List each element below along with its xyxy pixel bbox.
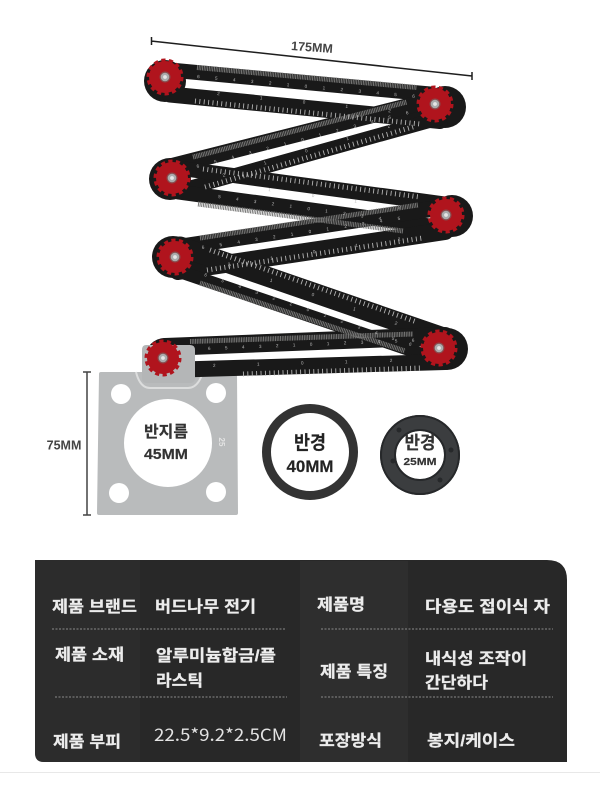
ruler digits: 654321012345	[201, 216, 401, 250]
panel background	[35, 560, 567, 762]
ring: 25MM	[381, 416, 459, 494]
ruler digits: 21012	[217, 91, 392, 113]
dimension: 75MM height	[47, 372, 91, 515]
row: features: 간단하다	[425, 674, 488, 692]
row: features: 제품 특징	[320, 663, 388, 681]
ring: 25MM: 반경	[404, 433, 436, 453]
ruler digits: 6543210123456	[196, 110, 409, 169]
ruler digits: 21012	[213, 358, 393, 368]
ring: 40MM: 반경	[294, 432, 326, 454]
column shading	[35, 560, 408, 762]
slider tab	[142, 345, 195, 383]
ruler digits	[196, 74, 415, 368]
row: brand	[52, 598, 256, 616]
row: material: 라스틱	[156, 672, 203, 690]
mounting plate: 45MM	[144, 446, 188, 463]
row: packaging	[319, 732, 515, 750]
row: features	[320, 650, 527, 692]
dimension: 175MM width	[151, 37, 472, 80]
row dividers	[52, 629, 553, 697]
ruler digits: 21012	[227, 236, 401, 267]
row: material: 알루미늄합금/플	[156, 647, 276, 665]
gray fine scales	[190, 68, 418, 351]
mounting plate	[97, 372, 238, 515]
row: material	[55, 646, 276, 690]
row: product name	[317, 596, 550, 616]
dimension: 175MM width: 175MM	[291, 39, 333, 56]
row: packaging: 봉지/케이스	[427, 732, 515, 750]
row: volume: 제품 부피	[53, 733, 121, 751]
ruler digits: 21012	[222, 123, 391, 178]
tick scales	[195, 101, 423, 374]
row: packaging: 포장방식	[319, 732, 382, 750]
joint ends	[144, 60, 473, 378]
ring: 40MM	[266, 408, 354, 496]
row: features: 내식성 조작이	[425, 650, 527, 668]
row: volume	[53, 721, 287, 751]
row: brand: 제품 브랜드	[52, 598, 137, 616]
row: product name: 다용도 접이식 자	[425, 598, 550, 616]
mounting plate: 25	[217, 438, 226, 447]
ruler digits: 21012	[228, 263, 399, 326]
dimension: 75MM height: 75MM	[47, 438, 81, 452]
folding ruler	[142, 60, 473, 383]
row: product name: 제품명	[317, 596, 365, 614]
row: volume: 22.5*9.2*2.5CM	[154, 721, 287, 746]
ruler digits: 6543210123456	[208, 338, 415, 351]
mounting plate: 반지름	[144, 423, 188, 441]
ring: 25MM: 25MM	[404, 457, 436, 468]
row: material: 제품 소재	[55, 646, 124, 664]
arm bars	[165, 70, 445, 370]
panel: product specification table	[35, 560, 567, 762]
knobs	[146, 60, 463, 375]
row: brand: 버드나무 전기	[155, 598, 256, 616]
ring: 40MM: 40MM	[286, 457, 334, 476]
ruler digits: 5432101234	[218, 194, 382, 221]
ruler digits: 1012	[268, 187, 401, 210]
ruler digits: 6543210123456	[197, 74, 415, 99]
ruler digits: 6543210123456	[204, 272, 413, 347]
